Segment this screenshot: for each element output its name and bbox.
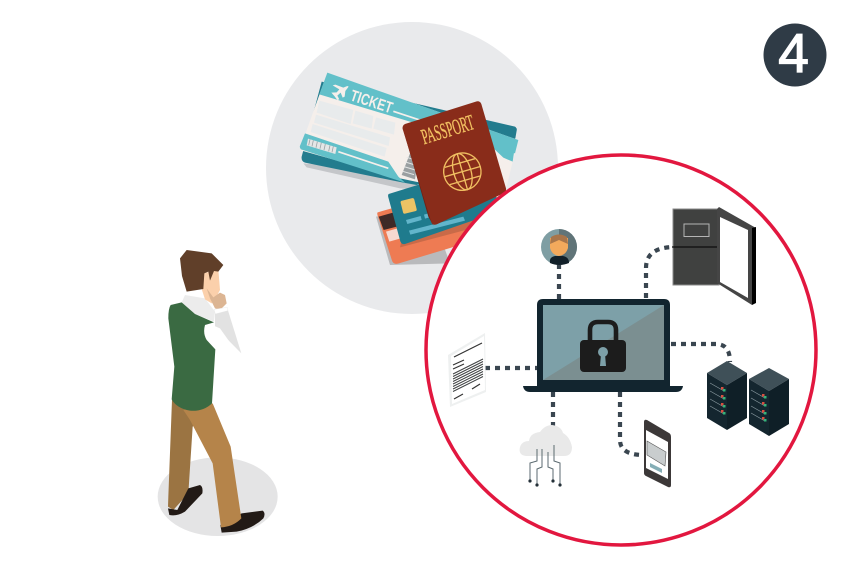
chip [400, 198, 417, 214]
padlock [580, 322, 626, 372]
number badge: 4 [778, 22, 809, 84]
ticket front [300, 73, 518, 200]
back shoe [168, 485, 203, 515]
ticket back layer [302, 82, 517, 185]
orange card [376, 192, 477, 265]
travel documents illustration [300, 73, 518, 265]
icon: server racks [707, 361, 789, 436]
icon: smartphone [644, 420, 671, 487]
icon: cloud circuit [520, 425, 572, 487]
number badge [764, 22, 826, 86]
collar [182, 295, 215, 322]
right rack [749, 368, 789, 436]
icon: laptop with padlock [523, 299, 683, 392]
person thinking [158, 250, 278, 536]
vest [168, 302, 215, 411]
arm shadow [215, 308, 241, 353]
ticket form fields [311, 101, 395, 157]
passport label: PASSPORT [418, 109, 477, 149]
front leg [183, 403, 241, 527]
cuff [214, 307, 228, 314]
hand [207, 288, 227, 310]
barcode [307, 139, 337, 154]
passport [402, 101, 506, 226]
ticket shadow [303, 163, 423, 190]
dotted connectors [485, 247, 730, 455]
floor shadow [158, 457, 278, 536]
laptop base [523, 386, 683, 392]
back leg [168, 400, 210, 510]
icon: airplane [331, 85, 349, 100]
shirt sleeve [205, 323, 241, 358]
laptop body [537, 299, 670, 386]
ticket label: TICKET [348, 88, 395, 117]
front shoe [220, 511, 265, 533]
background circle: travel documents [266, 22, 558, 314]
icon: document [448, 333, 486, 407]
screen [543, 305, 664, 380]
blue card [388, 167, 503, 247]
icon: user avatar [541, 229, 577, 265]
left rack [707, 361, 747, 430]
red circle: security panel [426, 155, 816, 545]
neck and face [202, 269, 220, 303]
icon: open door [672, 207, 756, 305]
icon: globe [439, 149, 485, 195]
hair [180, 250, 223, 292]
